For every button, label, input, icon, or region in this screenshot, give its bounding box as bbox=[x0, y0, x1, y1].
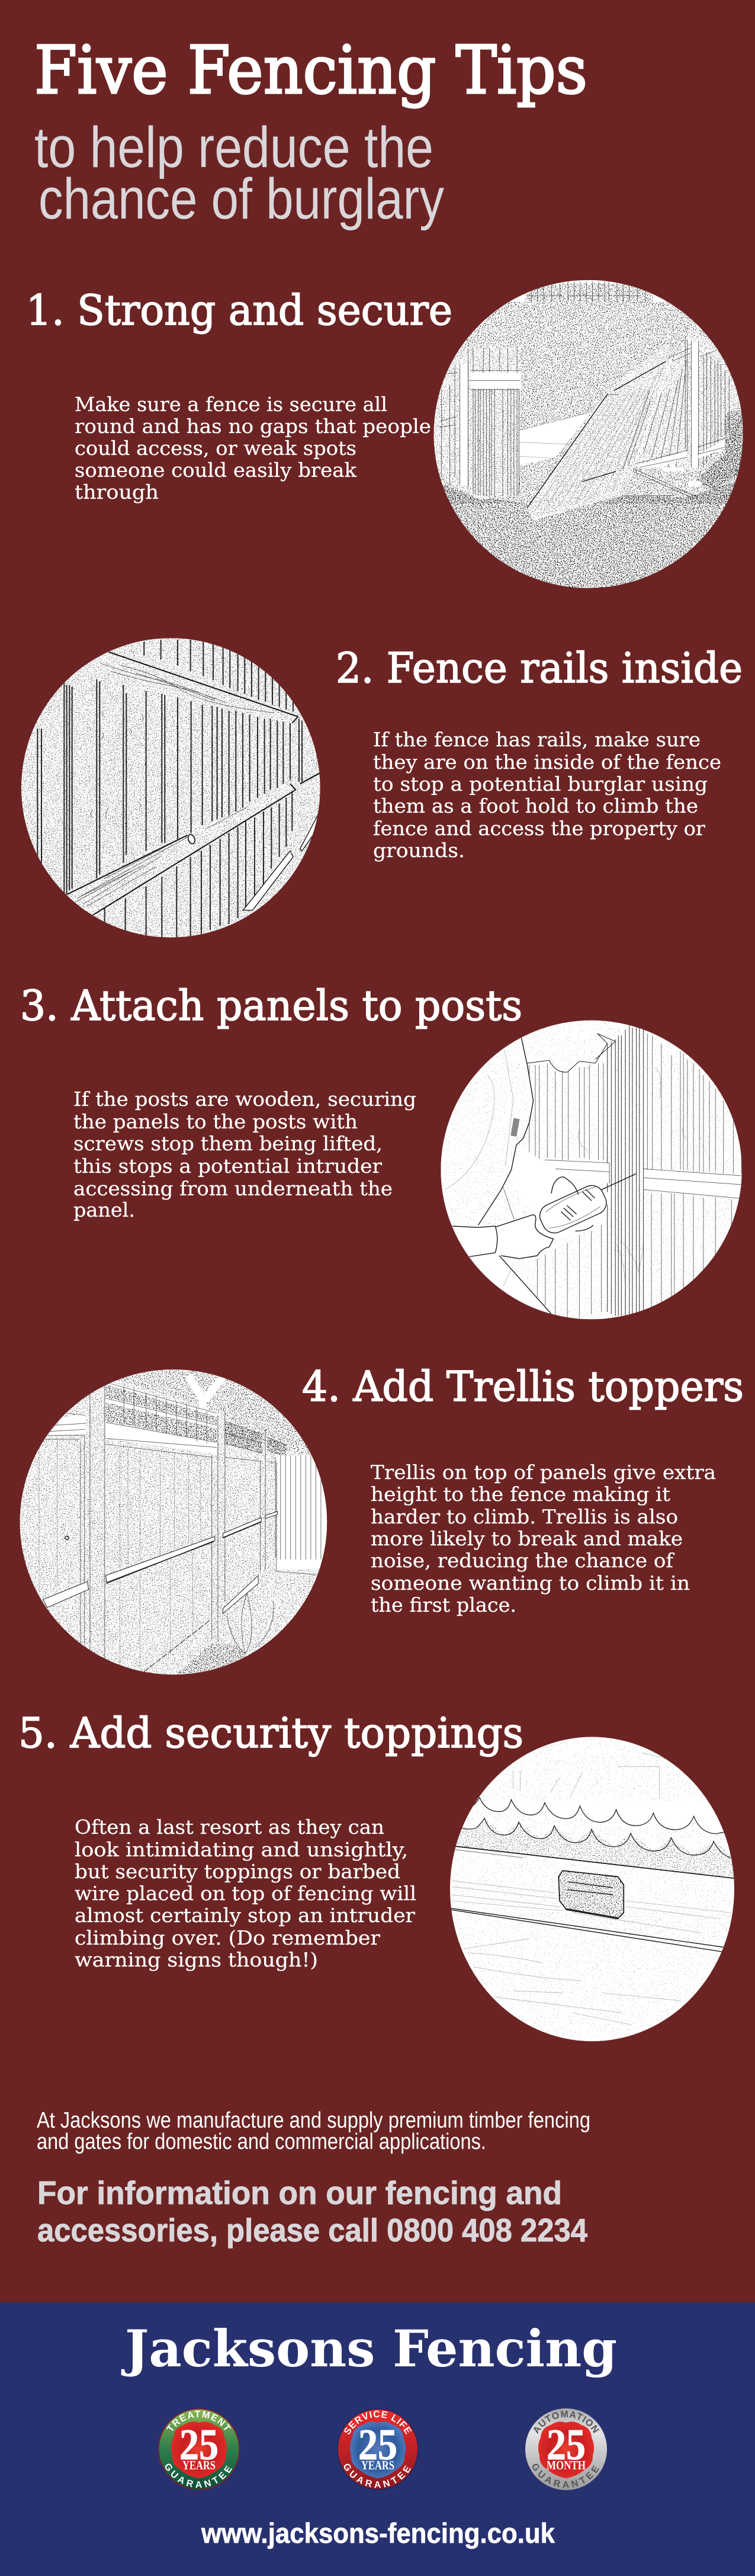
text block: tip 1: Make sure a fence is secure all bbox=[75, 393, 387, 416]
text block: tip 3: accessing from underneath the bbox=[73, 1177, 393, 1200]
subtitle: to help reduce the bbox=[34, 115, 433, 179]
text block: tip 1: through bbox=[75, 480, 159, 503]
text block: tip 5: but security toppings or barbed bbox=[75, 1860, 400, 1883]
text block: tip 1 bbox=[75, 393, 431, 503]
text block: tip 2 bbox=[373, 728, 721, 862]
badge: treatment guarantee: GUARANTEE bbox=[165, 2464, 232, 2488]
text block: tip 5: climbing over. (Do remember bbox=[75, 1926, 380, 1949]
text block: tip 5: warning signs though!) bbox=[75, 1948, 318, 1971]
photo sketch: security topping with plaque bbox=[444, 1733, 740, 2046]
text block: tip 4: more likely to break and make bbox=[371, 1527, 683, 1550]
text block: tip 2: fence and access the property or bbox=[373, 817, 705, 840]
text block: tip 3: panel. bbox=[73, 1198, 135, 1221]
badge: treatment guarantee: YEARS bbox=[182, 2458, 216, 2472]
text block: tip 4: height to the fence making it bbox=[371, 1483, 670, 1506]
call to action: accessories, please call 0800 408 2234 bbox=[37, 2212, 587, 2248]
text block: tip 5: almost certainly stop an intruder bbox=[75, 1904, 415, 1927]
text block: tip 4: the first place. bbox=[371, 1593, 516, 1616]
website: www.jacksons-fencing.co.uk bbox=[201, 2517, 555, 2549]
text block: tip 2: If the fence has rails, make sure bbox=[373, 728, 701, 751]
badge: automation guarantee: MONTH bbox=[547, 2458, 586, 2472]
text block: tip 3: If the posts are wooden, securing bbox=[73, 1087, 416, 1111]
subtitle bbox=[34, 115, 444, 231]
text block: tip 4: harder to climb. Trellis is also bbox=[371, 1505, 678, 1528]
footer panel bbox=[0, 2302, 755, 2576]
title: Five Fencing Tips bbox=[34, 33, 587, 109]
photo sketch: broken fence panel bbox=[429, 275, 749, 592]
text block: tip 5: look intimidating and unsightly, bbox=[75, 1838, 408, 1861]
badge: service life guarantee: YEARS bbox=[361, 2458, 394, 2472]
text block: tip 1: could access, or weak spots bbox=[75, 437, 356, 460]
badge: treatment guarantee: 25 bbox=[179, 2421, 219, 2469]
badge: service life guarantee: 25 bbox=[358, 2421, 397, 2469]
heading: tip 4: 4. Add Trellis toppers bbox=[302, 1362, 744, 1411]
text block: tip 4: noise, reducing the chance of bbox=[371, 1549, 675, 1572]
badge: treatment guarantee bbox=[158, 2408, 240, 2490]
badge: service life guarantee: SERVICE LIFE bbox=[344, 2411, 412, 2434]
badge: automation guarantee bbox=[525, 2408, 607, 2490]
text block: tip 4: someone wanting to climb it in bbox=[371, 1571, 690, 1595]
text block: tip 2: grounds. bbox=[373, 839, 465, 862]
heading: tip 1: 1. Strong and secure bbox=[26, 286, 452, 335]
text block: tip 2: to stop a potential burglar using bbox=[373, 772, 708, 795]
company description bbox=[37, 2108, 590, 2154]
footer background bbox=[0, 2302, 755, 2576]
text block: tip 4 bbox=[371, 1461, 716, 1616]
photo sketch: drilling a panel to a post bbox=[435, 1016, 749, 1326]
text block: tip 5 bbox=[75, 1815, 416, 1971]
call to action bbox=[37, 2174, 587, 2248]
badge: treatment guarantee: TREATMENT bbox=[166, 2411, 231, 2431]
text block: tip 3: this stops a potential intruder bbox=[73, 1154, 382, 1178]
text block: tip 1: someone could easily break bbox=[75, 458, 357, 482]
text block: tip 5: wire placed on top of fencing will bbox=[75, 1882, 416, 1905]
heading: tip 2: 2. Fence rails inside bbox=[336, 644, 743, 692]
badge: automation guarantee: AUTOMATION bbox=[534, 2411, 599, 2434]
photo sketch: trellis topped fence bbox=[15, 1365, 332, 1679]
badge: automation guarantee: GUARANTEE bbox=[532, 2464, 599, 2488]
text block: tip 3 bbox=[73, 1087, 416, 1221]
text block: tip 3: the panels to the posts with bbox=[73, 1110, 358, 1133]
photo sketch: fence rails close up bbox=[18, 634, 326, 942]
text block: tip 1: round and has no gaps that people bbox=[75, 415, 431, 438]
brand name: Jacksons Fencing bbox=[121, 2320, 617, 2379]
text block: tip 2: they are on the inside of the fence bbox=[373, 750, 721, 774]
badge: service life guarantee: GUARANTEE bbox=[343, 2464, 411, 2488]
text block: tip 5: Often a last resort as they can bbox=[75, 1815, 384, 1839]
company description: At Jacksons we manufacture and supply premium timber fencing bbox=[37, 2108, 590, 2133]
text block: tip 3: screws stop them being lifted, bbox=[73, 1132, 383, 1155]
heading: tip 5: 5. Add security toppings bbox=[18, 1709, 523, 1757]
subtitle: chance of burglary bbox=[38, 166, 444, 231]
badge: automation guarantee: 25 bbox=[547, 2421, 586, 2469]
badge: service life guarantee bbox=[337, 2408, 419, 2490]
text block: tip 4: Trellis on top of panels give extra bbox=[371, 1461, 716, 1484]
call to action: For information on our fencing and bbox=[37, 2174, 562, 2211]
heading: tip 3: 3. Attach panels to posts bbox=[20, 981, 522, 1030]
company description: and gates for domestic and commercial applications. bbox=[37, 2129, 486, 2154]
text block: tip 2: them as a foot hold to climb the bbox=[373, 794, 698, 817]
